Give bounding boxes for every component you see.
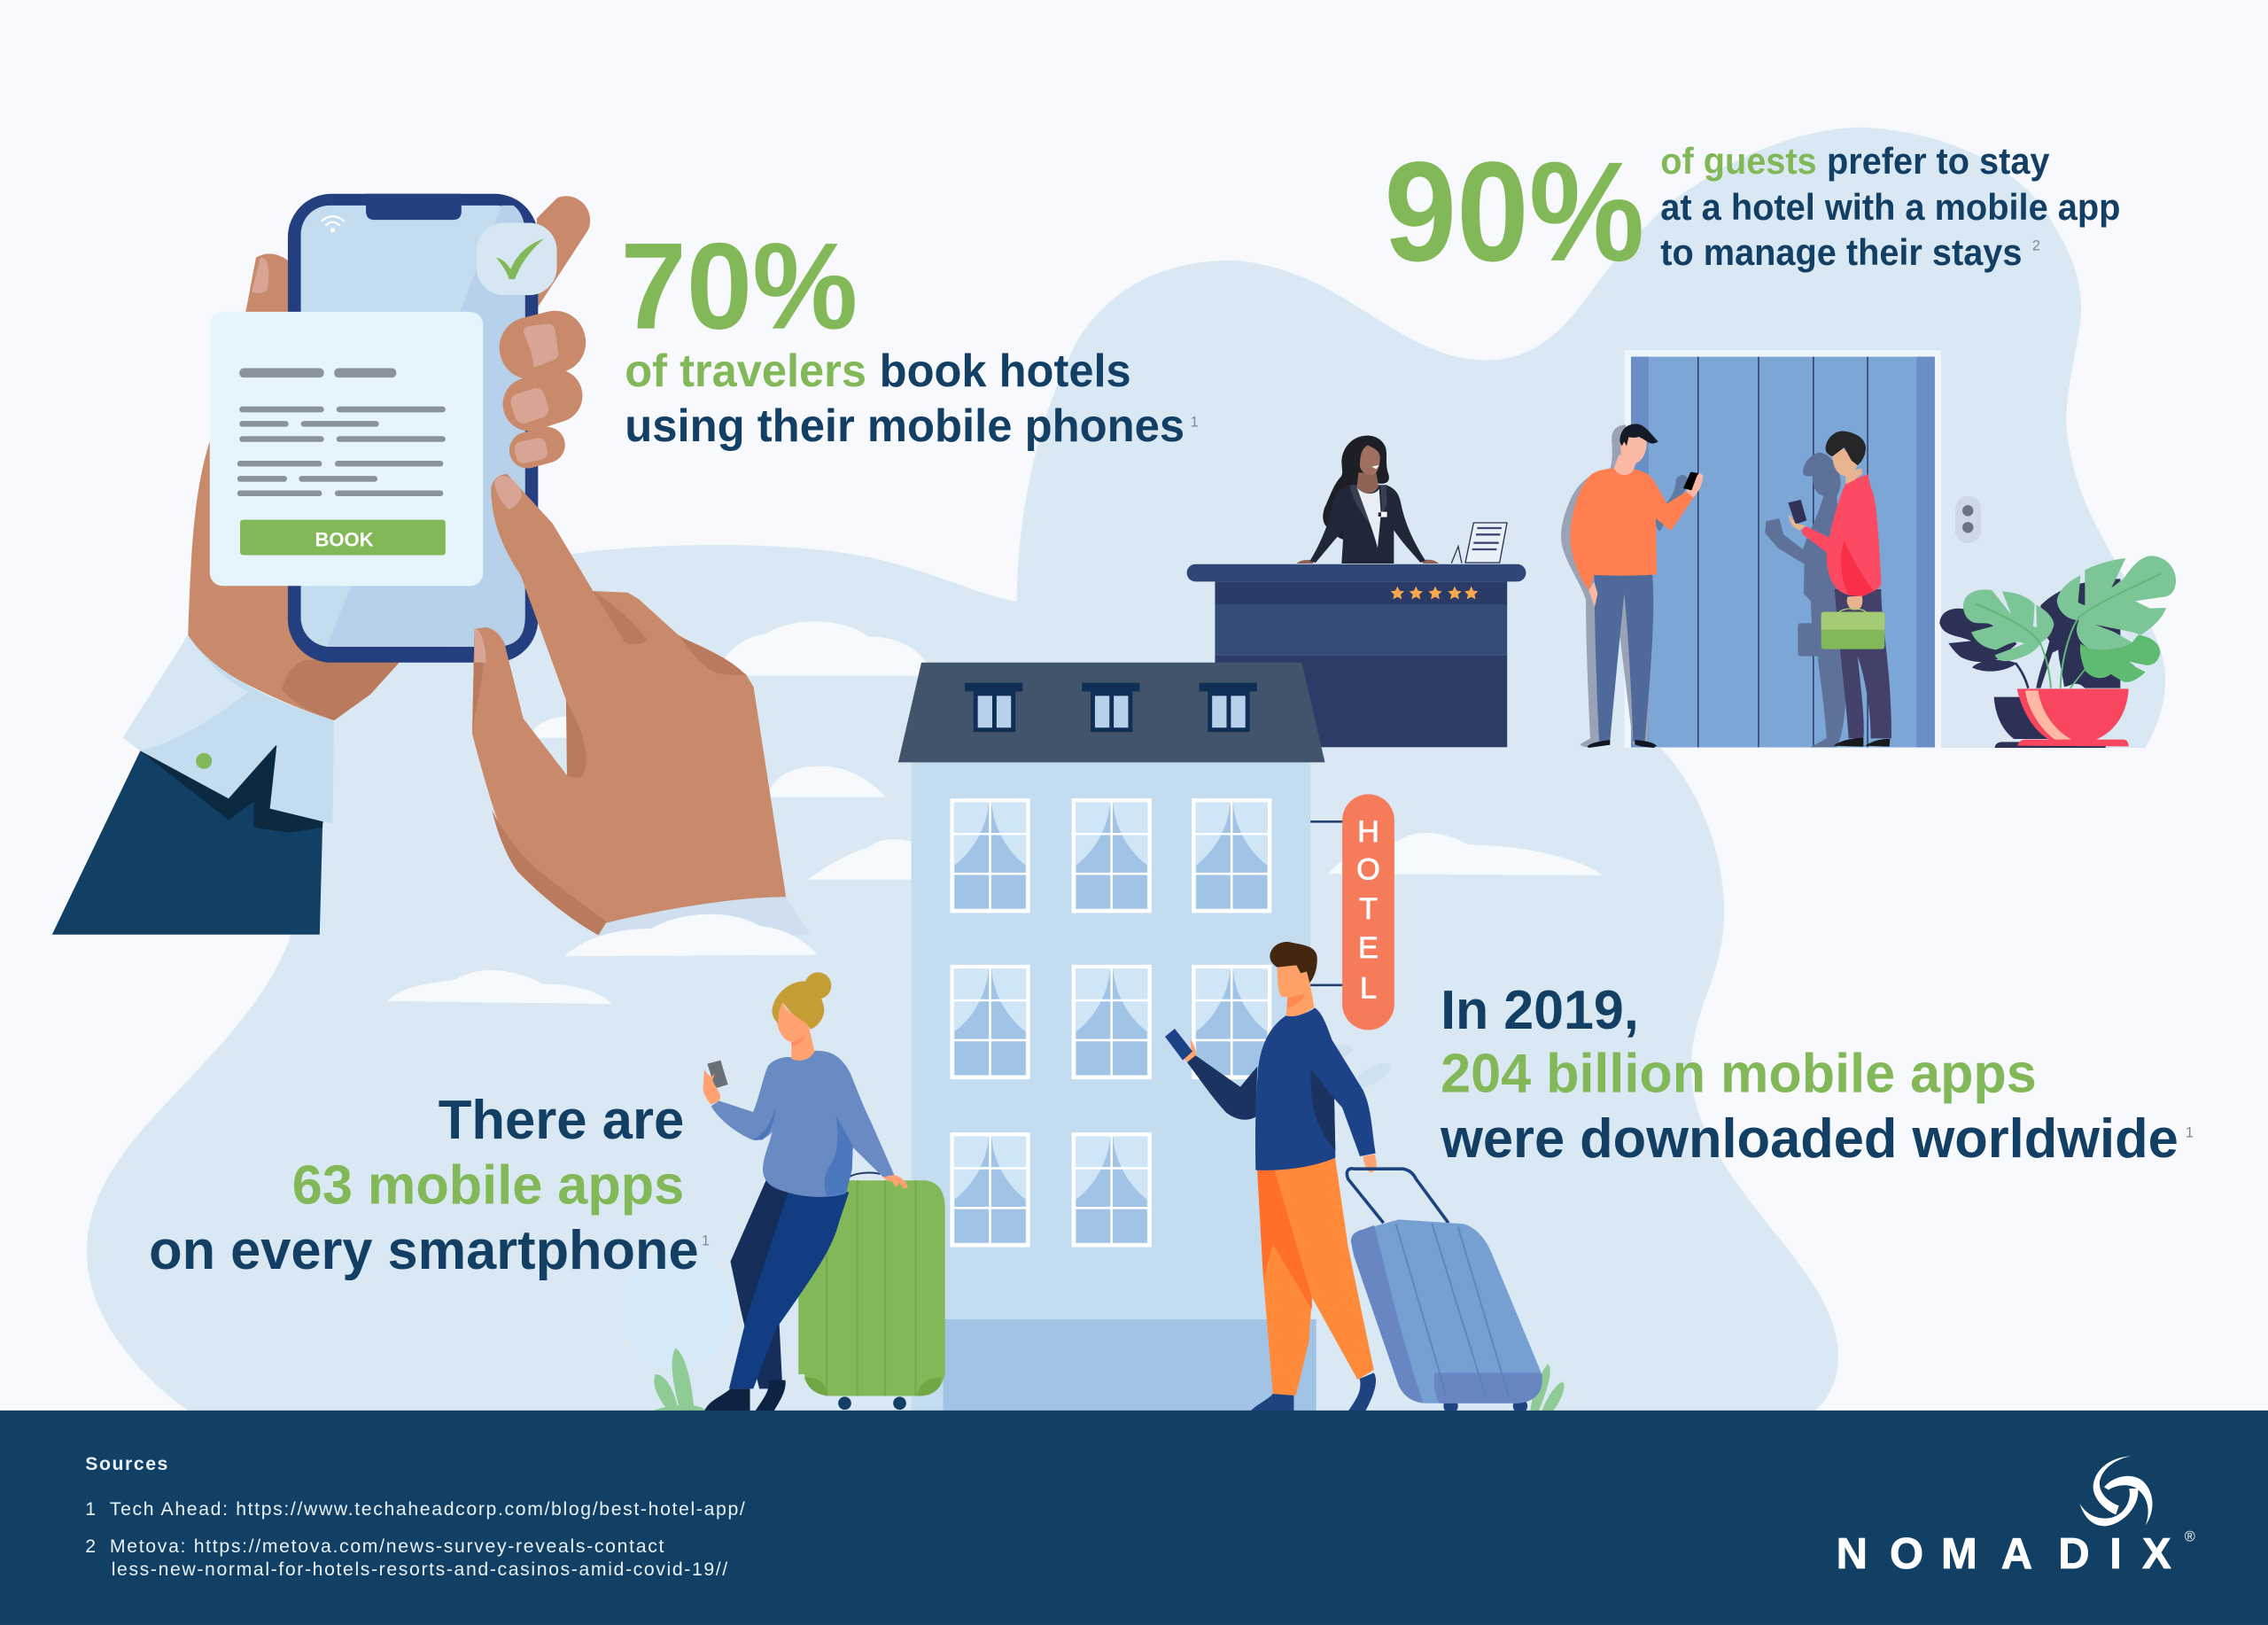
building body <box>912 762 1310 1411</box>
thumb nail <box>252 258 268 293</box>
dark pot <box>1994 697 2048 739</box>
potted plant <box>1939 556 2176 748</box>
stat: 204 billion: 204 billion mobile apps <box>1441 1044 2037 1105</box>
gripping fingers <box>493 304 592 472</box>
red pot <box>2017 688 2129 740</box>
cloud over wrist <box>564 914 817 956</box>
palm shadow <box>282 660 400 720</box>
rating stars <box>1391 587 1478 599</box>
phone <box>1165 1029 1192 1061</box>
sources <box>85 1454 745 1580</box>
receptionist <box>1296 436 1439 564</box>
face and neck <box>1278 965 1314 1016</box>
hair <box>1270 942 1317 983</box>
stat: 70 percent: using their mobile phones <box>625 400 1184 452</box>
stat: 204 billion: In 2019, <box>1441 980 1639 1041</box>
sources: less-new-normal-for-hotels-resorts-and-casinos-amid-covid-19// <box>112 1559 727 1580</box>
stat: 90 percent: 90% <box>1384 132 1644 291</box>
sources: Sources <box>85 1454 167 1474</box>
sleeve shadow <box>140 745 322 833</box>
clouds <box>388 621 1603 1004</box>
woman with phone <box>703 972 908 1411</box>
right plant sprout <box>1530 1365 1564 1411</box>
hotel sign <box>1310 794 1394 1030</box>
nomadix logo: NOMADIX <box>1837 1530 2171 1578</box>
stat: 90 percent <box>1384 132 2120 291</box>
right cuff <box>598 897 810 940</box>
hair bun <box>804 972 831 999</box>
stat: 204 billion <box>1440 980 2194 1170</box>
front leg <box>729 1189 849 1388</box>
nails <box>494 476 522 509</box>
shadow on door <box>1765 453 1847 747</box>
back leg <box>730 1179 798 1388</box>
elevator <box>1624 350 1941 748</box>
left arm <box>1187 1055 1257 1120</box>
book button <box>240 520 446 555</box>
dark leaves <box>1939 579 2120 688</box>
stat: 63 apps <box>149 1090 710 1281</box>
hotel building <box>898 663 1325 1411</box>
hotel sign: O <box>1356 853 1380 887</box>
left hand and arm holding phone <box>52 196 590 935</box>
stat: 63 apps: 1 <box>702 1233 710 1249</box>
blue suitcase <box>1347 1169 1542 1413</box>
right hand <box>472 474 810 940</box>
stat: 70 percent: of travelers <box>625 346 866 397</box>
hotel sign: T <box>1359 892 1378 926</box>
hotel sign: E <box>1358 931 1379 965</box>
stat: 63 apps: on every smartphone <box>149 1220 699 1281</box>
upper body <box>1165 942 1377 1172</box>
stat: 90 percent: prefer to stay <box>1827 140 2049 182</box>
hand palm <box>188 253 400 720</box>
nomadix logo <box>1837 1456 2195 1578</box>
ground floor band <box>943 1319 1317 1411</box>
sources: 1 Tech Ahead: https://www.techaheadcorp.com/blog/best-hotel-app/ <box>85 1499 745 1520</box>
phone <box>288 194 538 663</box>
nomadix logo: ® <box>2185 1529 2195 1545</box>
windows grid <box>951 798 1271 1247</box>
shoes <box>704 1380 786 1411</box>
face <box>777 1003 809 1042</box>
cufflink <box>196 753 212 769</box>
left monstera leaf <box>1963 589 2054 661</box>
footer <box>0 1411 2268 1625</box>
sweater <box>711 1051 894 1197</box>
big right monstera leaf <box>2057 556 2176 650</box>
hair <box>773 981 824 1030</box>
stat: 63 apps: 63 mobile apps <box>292 1155 684 1216</box>
hotel sign: L <box>1360 972 1377 1006</box>
pale leaf shadow <box>1332 1045 1391 1088</box>
top finger <box>537 196 590 307</box>
shadow <box>1561 424 1651 747</box>
check badge <box>477 222 557 295</box>
sweater <box>1255 1007 1376 1170</box>
swirl <box>2079 1456 2153 1526</box>
light patch behind text <box>622 1248 732 1370</box>
stat: 204 billion: 1 <box>2186 1124 2194 1140</box>
stat: 90 percent: to manage their stays <box>1660 231 2022 273</box>
hand <box>1184 1039 1196 1061</box>
green briefcase <box>1821 609 1884 649</box>
phone <box>707 1061 728 1088</box>
pants <box>1257 1157 1374 1396</box>
background blob <box>87 128 2165 1411</box>
stat: 70 percent: book hotels <box>880 346 1131 397</box>
stat: 90 percent: of guests <box>1660 140 1817 182</box>
sleeve <box>52 723 333 935</box>
stat: 63 apps: There are <box>439 1090 684 1151</box>
neck <box>791 1028 814 1061</box>
man in red shirt <box>1765 431 1891 747</box>
dormer windows <box>965 683 1257 732</box>
lower right monstera leaf <box>2080 635 2160 682</box>
stat: 90 percent: 2 <box>2032 237 2040 253</box>
man in orange sweater <box>1561 424 1703 748</box>
wifi icon <box>321 216 345 231</box>
green suitcase <box>798 1180 945 1410</box>
document stand <box>1451 523 1507 564</box>
stat: 70 percent: 1 <box>1191 415 1199 431</box>
reception desk <box>1187 564 1526 747</box>
stat: 90 percent: at a hotel with a mobile app <box>1660 186 2120 228</box>
cuff <box>123 635 334 824</box>
text placeholder lines <box>237 369 446 496</box>
hotel sign: H <box>1357 815 1379 849</box>
left plant sprout <box>654 1349 707 1411</box>
stat: 204 billion: were downloaded worldwide <box>1440 1108 2179 1170</box>
finger shadows <box>593 591 647 644</box>
elevator buttons <box>1955 496 1981 543</box>
right hand <box>1363 1155 1377 1172</box>
upper body <box>703 972 908 1197</box>
shoes <box>1250 1372 1376 1411</box>
booking card <box>210 312 483 586</box>
hand on suitcase <box>883 1175 908 1189</box>
sources: 2 Metova: https://metova.com/news-survey-reveals-contact <box>85 1536 664 1557</box>
book button: BOOK <box>315 528 374 550</box>
stat: 70 percent <box>620 218 1199 452</box>
man with suitcase <box>1165 942 1377 1411</box>
roof <box>898 663 1325 762</box>
stat: 70 percent: 70% <box>620 218 858 355</box>
suitcase handle <box>849 1173 880 1177</box>
